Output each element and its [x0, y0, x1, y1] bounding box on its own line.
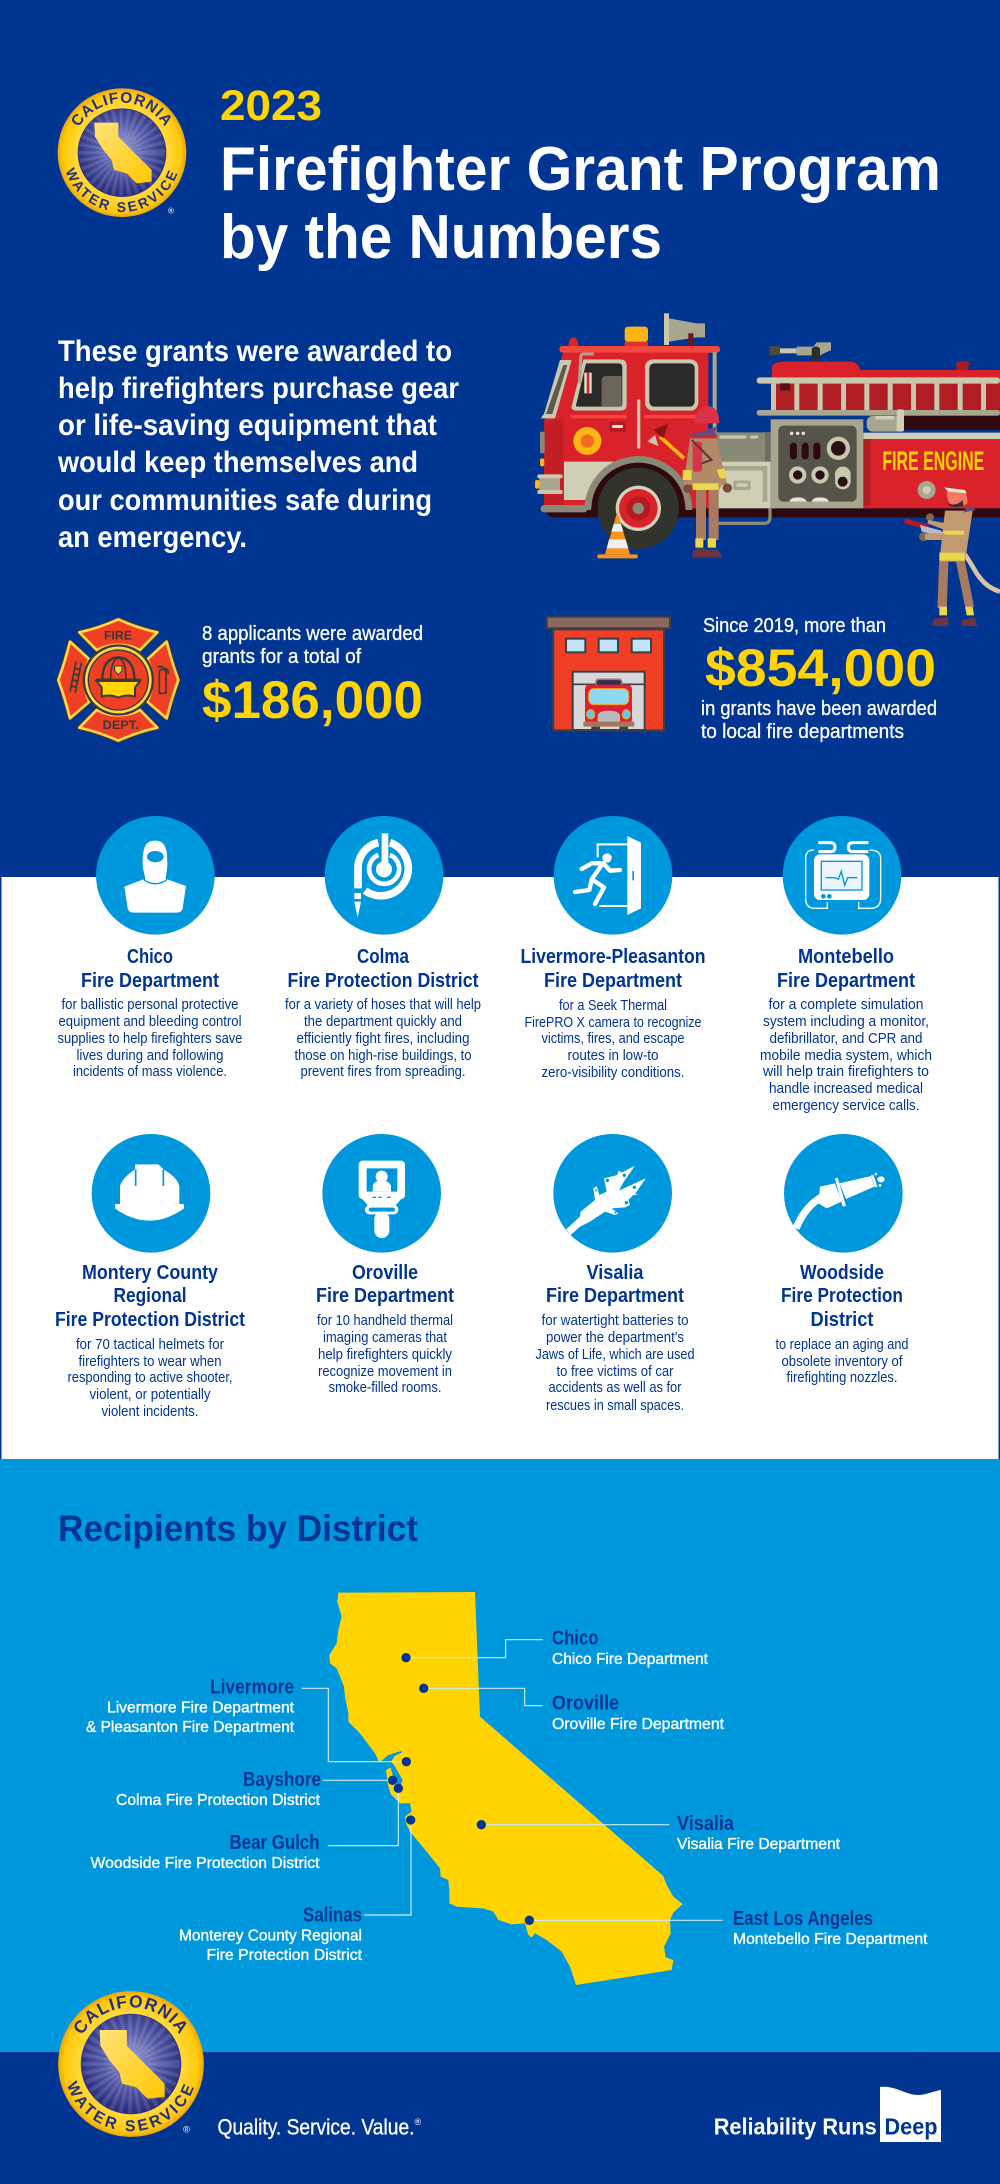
panel: Oroville Fire Department: Oroville: [352, 1262, 418, 1284]
icon: coiled hose: [325, 816, 443, 935]
helmet: [102, 657, 134, 680]
panel: Visalia Fire Department: Visalia: [586, 1262, 644, 1284]
panel: Woodside Fire Protection District: obsolete inventory of: [782, 1354, 903, 1370]
title line 1: Firefighter Grant Program: [220, 135, 941, 204]
panel: Livermore-Pleasanton Fire Department: [520, 816, 706, 1081]
title: [220, 82, 941, 272]
underbody: [545, 508, 1000, 517]
stat: total awarded 2023: $186,000: [202, 671, 423, 730]
panel: Visalia Fire Department: to free victims of car: [556, 1364, 674, 1380]
map label: East Los Angeles: East Los Angeles: [733, 1908, 873, 1930]
panel: Oroville Fire Department: imaging cameras that: [323, 1330, 447, 1346]
panel: Livermore-Pleasanton Fire Department: FirePRO X camera to recognize: [524, 1015, 702, 1031]
panel: Monterey County Regional Fire Protection District: for 70 tactical helmets for: [76, 1337, 224, 1353]
panel: Visalia Fire Department: power the department's: [546, 1330, 684, 1346]
stat: total since 2019: [701, 615, 937, 743]
logo: Reliability Runs Deep: Reliability Runs: [714, 2114, 877, 2140]
map label: Oroville: [552, 1692, 725, 1733]
map label: Oroville: Oroville Fire Department: [552, 1716, 725, 1733]
panel: Chico Fire Department: for ballistic personal protective: [62, 997, 238, 1013]
panel: Livermore-Pleasanton Fire Department: routes in low-to: [568, 1048, 658, 1064]
icon: person running through exit door: [554, 816, 672, 935]
intro paragraph: an emergency.: [58, 521, 247, 554]
map label: Oroville: Oroville: [552, 1692, 619, 1714]
intro paragraph: would keep themselves and: [57, 446, 418, 479]
panel: Visalia Fire Department: Jaws of Life, which are used: [536, 1347, 694, 1363]
panel: Colma Fire Protection District: [285, 816, 481, 1080]
background: dark blue footer band: [0, 2052, 1000, 2184]
heading: Recipients by District: Recipients by District: [58, 1508, 418, 1549]
dark slot and body: [903, 416, 1000, 430]
map: California with district markers: [302, 1592, 723, 1985]
panel: Colma Fire Protection District: those on high-rise buildings, to: [294, 1048, 472, 1064]
background: white recipients panel: [0, 877, 1000, 1459]
panel: Livermore-Pleasanton Fire Department: victims, fires, and escape: [542, 1031, 684, 1047]
map label: Bear Gulch: Bear Gulch: [230, 1832, 320, 1854]
cone: [605, 512, 630, 554]
panel: Woodside Fire Protection District: Woodside: [800, 1262, 884, 1284]
background: light blue map panel: [0, 1459, 1000, 2052]
panel: Oroville Fire Department: help firefighters quickly: [318, 1347, 453, 1363]
icon: fire station: [547, 617, 670, 730]
logo: Reliability Runs Deep: [714, 2087, 941, 2142]
panel: Montebello Fire Department: system including a monitor,: [763, 1014, 929, 1030]
panel: Livermore-Pleasanton Fire Department: for a Seek Thermal: [559, 998, 667, 1014]
map label: Bayshore: Colma Fire Protection District: [116, 1792, 321, 1809]
intro paragraph: help firefighters purchase gear: [58, 372, 459, 405]
district dots: [388, 1653, 534, 1925]
panel: Chico Fire Department: supplies to help firefighters save: [58, 1031, 242, 1047]
windows: [541, 360, 572, 418]
upper body and ladder: [772, 362, 1000, 412]
axe: [660, 437, 684, 458]
panel: Visalia Fire Department: [536, 1134, 694, 1414]
horn: [664, 313, 669, 345]
stat: total awarded 2023: grants for a total of: [202, 646, 361, 668]
panel: Monterey County Regional Fire Protection District: violent, or potentially: [90, 1387, 211, 1403]
cab: [544, 352, 717, 508]
map label: Livermore: [86, 1676, 295, 1736]
panel: Woodside Fire Protection District: firefighting nozzles.: [786, 1370, 898, 1386]
panel: Oroville Fire Department: [316, 1134, 454, 1396]
firefighter 2 hose: [937, 534, 1000, 592]
deck gun: [769, 346, 780, 355]
panel: Woodside Fire Protection District: Fire Protection: [781, 1285, 903, 1307]
map label: Bear Gulch: Woodside Fire Protection District: [90, 1855, 320, 1872]
logo: California Water Service: ®: [168, 206, 174, 215]
tagline: Quality. Service. Value.: ®: [414, 2117, 422, 2127]
panel: Monterey County Regional Fire Protection District: Fire Protection District: [55, 1309, 245, 1331]
intro paragraph: our communities safe during: [58, 484, 432, 517]
map label: Bayshore: Bayshore: [243, 1769, 321, 1791]
map label: Visalia: Visalia: [677, 1813, 735, 1835]
stat: total since 2019: in grants have been awarded: [701, 698, 937, 720]
panel: Woodside Fire Protection District: District: [810, 1309, 874, 1331]
panel: Visalia Fire Department: accidents as well as for: [548, 1380, 682, 1396]
map label: Salinas: [179, 1904, 363, 1964]
firefighter 1: [696, 490, 706, 540]
title line 2: by the Numbers: [220, 203, 662, 272]
intro paragraph: These grants were awarded to: [58, 335, 452, 368]
icon: fire department badge: DEPT.: [103, 718, 139, 732]
illustration: fire engine with firefighters: [535, 313, 1000, 626]
panel: Visalia Fire Department: for watertight batteries to: [542, 1313, 688, 1329]
panel: Montebello Fire Department: [760, 816, 932, 1114]
panel: Livermore-Pleasanton Fire Department: zero-visibility conditions.: [542, 1065, 684, 1081]
stat: total since 2019: to local fire departments: [701, 721, 904, 743]
panel: Monterey County Regional Fire Protection District: violent incidents.: [102, 1404, 198, 1420]
icon: balaclava hood: [96, 816, 215, 935]
map label: Visalia: Visalia Fire Department: [677, 1836, 841, 1853]
map label: Livermore: Livermore Fire Department: [107, 1700, 295, 1716]
icon: defibrillator: [783, 816, 901, 935]
tagline: Quality. Service. Value.: Quality. Service. Value.: [218, 2114, 414, 2140]
intro paragraph: [57, 335, 459, 554]
map label: Chico: Chico Fire Department: [552, 1651, 709, 1668]
panel: Colma Fire Protection District: for a variety of hoses that will help: [285, 997, 481, 1013]
map label: East Los Angeles: [733, 1908, 928, 1948]
panel: Montebello Fire Department: Montebello: [798, 946, 894, 968]
icon: fire department badge: FIRE: [104, 628, 132, 642]
map label: Bayshore: [116, 1769, 321, 1809]
panel: Monterey County Regional Fire Protection District: Regional: [114, 1285, 186, 1307]
panel: Chico Fire Department: Fire Department: [81, 970, 219, 992]
stat: total awarded 2023: [202, 623, 423, 730]
map label: Chico: Chico: [552, 1628, 598, 1650]
stat: total since 2019: $854,000: [705, 639, 936, 698]
icon: handheld thermal camera: [322, 1134, 441, 1253]
map label: Salinas: Monterey County Regional: [179, 1928, 362, 1944]
stat: total awarded 2023: 8 applicants were awarded: [202, 623, 423, 645]
panel: Oroville Fire Department: Fire Department: [316, 1285, 454, 1307]
panel: Montebello Fire Department: will help train firefighters to: [762, 1064, 929, 1080]
icon: jaws of life: [553, 1134, 672, 1253]
panel: Colma Fire Protection District: prevent fires from spreading.: [300, 1064, 466, 1080]
panel: Oroville Fire Department: for 10 handheld thermal: [317, 1313, 453, 1329]
panel: Woodside Fire Protection District: [776, 1134, 908, 1386]
panel: Montebello Fire Department: Fire Department: [777, 970, 915, 992]
bumper: [541, 505, 587, 512]
icon: fire department badge: [58, 619, 178, 741]
icon: hose nozzle: [784, 1134, 903, 1253]
panel: Chico Fire Department: [58, 816, 242, 1080]
logo: California Water Service footer: CALIFORNIA: [74, 1995, 186, 2034]
logo: California Water Service: [58, 88, 186, 217]
panel: Montebello Fire Department: for a complete simulation: [768, 997, 924, 1013]
panel: Oroville Fire Department: recognize movement in: [318, 1364, 452, 1380]
panel: Colma Fire Protection District: efficiently fight fires, including: [296, 1031, 470, 1047]
wheel: [592, 462, 685, 517]
logo: California Water Service footer: ®: [183, 2125, 190, 2135]
panel: Chico Fire Department: incidents of mass violence.: [73, 1064, 227, 1080]
title year: 2023: [220, 82, 322, 130]
stat: total since 2019: Since 2019, more than: [703, 615, 886, 637]
rear compartments: [717, 432, 771, 462]
panel: Monterey County Regional Fire Protection District: Montery County: [82, 1262, 219, 1284]
panel: Montebello Fire Department: emergency service calls.: [772, 1098, 920, 1114]
logo: California Water Service footer: [58, 1991, 204, 2137]
pump panel: [771, 419, 863, 508]
logo: California Water Service: CALIFORNIA: [72, 92, 171, 126]
panel: Woodside Fire Protection District: to replace an aging and: [776, 1337, 908, 1353]
panel: Montebello Fire Department: mobile media system, which: [760, 1048, 932, 1064]
map label: Bear Gulch: [90, 1832, 320, 1872]
intro paragraph: or life-saving equipment that: [58, 409, 437, 442]
panel: Livermore-Pleasanton Fire Department: Livermore-Pleasanton: [520, 946, 706, 968]
panel: Colma Fire Protection District: Fire Protection District: [288, 970, 479, 992]
icon: tactical helmet: [92, 1134, 210, 1253]
map label: Livermore: & Pleasanton Fire Department: [86, 1719, 295, 1736]
map label: East Los Angeles: Montebello Fire Department: [733, 1931, 928, 1948]
map label: Salinas: Fire Protection District: [206, 1947, 363, 1964]
panel: Montebello Fire Department: handle increased medical: [769, 1081, 923, 1097]
panel: Visalia Fire Department: Fire Department: [546, 1285, 684, 1307]
map label: Chico: [552, 1628, 709, 1668]
panel: Colma Fire Protection District: Colma: [357, 946, 410, 968]
panel: Chico Fire Department: equipment and bleeding control: [58, 1014, 242, 1030]
map label: Salinas: Salinas: [303, 1904, 362, 1926]
panel: Livermore-Pleasanton Fire Department: Fire Department: [544, 970, 682, 992]
connector lines: [302, 1640, 723, 1920]
logo: Reliability Runs Deep: Deep: [884, 2114, 938, 2140]
panel: Colma Fire Protection District: the department quickly and: [304, 1014, 462, 1030]
panel: Chico Fire Department: lives during and following: [76, 1048, 224, 1064]
panel: Monterey County Regional Fire Protection District: firefighters to wear when: [78, 1354, 222, 1370]
map label: Livermore: Livermore: [210, 1676, 294, 1698]
panel: Oroville Fire Department: smoke-filled rooms.: [328, 1380, 442, 1396]
map label: Visalia: [677, 1813, 841, 1853]
panel: Montebello Fire Department: defibrillator, and CPR and: [770, 1031, 922, 1047]
panel: Visalia Fire Department: rescues in small spaces.: [546, 1398, 684, 1414]
white front panel: [564, 462, 613, 500]
panel: Monterey County Regional Fire Protection District: [55, 1134, 245, 1420]
background: dark blue header: [0, 0, 1000, 877]
panel: Chico Fire Department: Chico: [127, 946, 173, 968]
panel: Monterey County Regional Fire Protection District: responding to active shooter,: [68, 1370, 232, 1386]
logo: California Water Service: WATER SERVICE: [66, 166, 178, 212]
logo: California Water Service footer: WATER SERVICE: [68, 2080, 194, 2132]
